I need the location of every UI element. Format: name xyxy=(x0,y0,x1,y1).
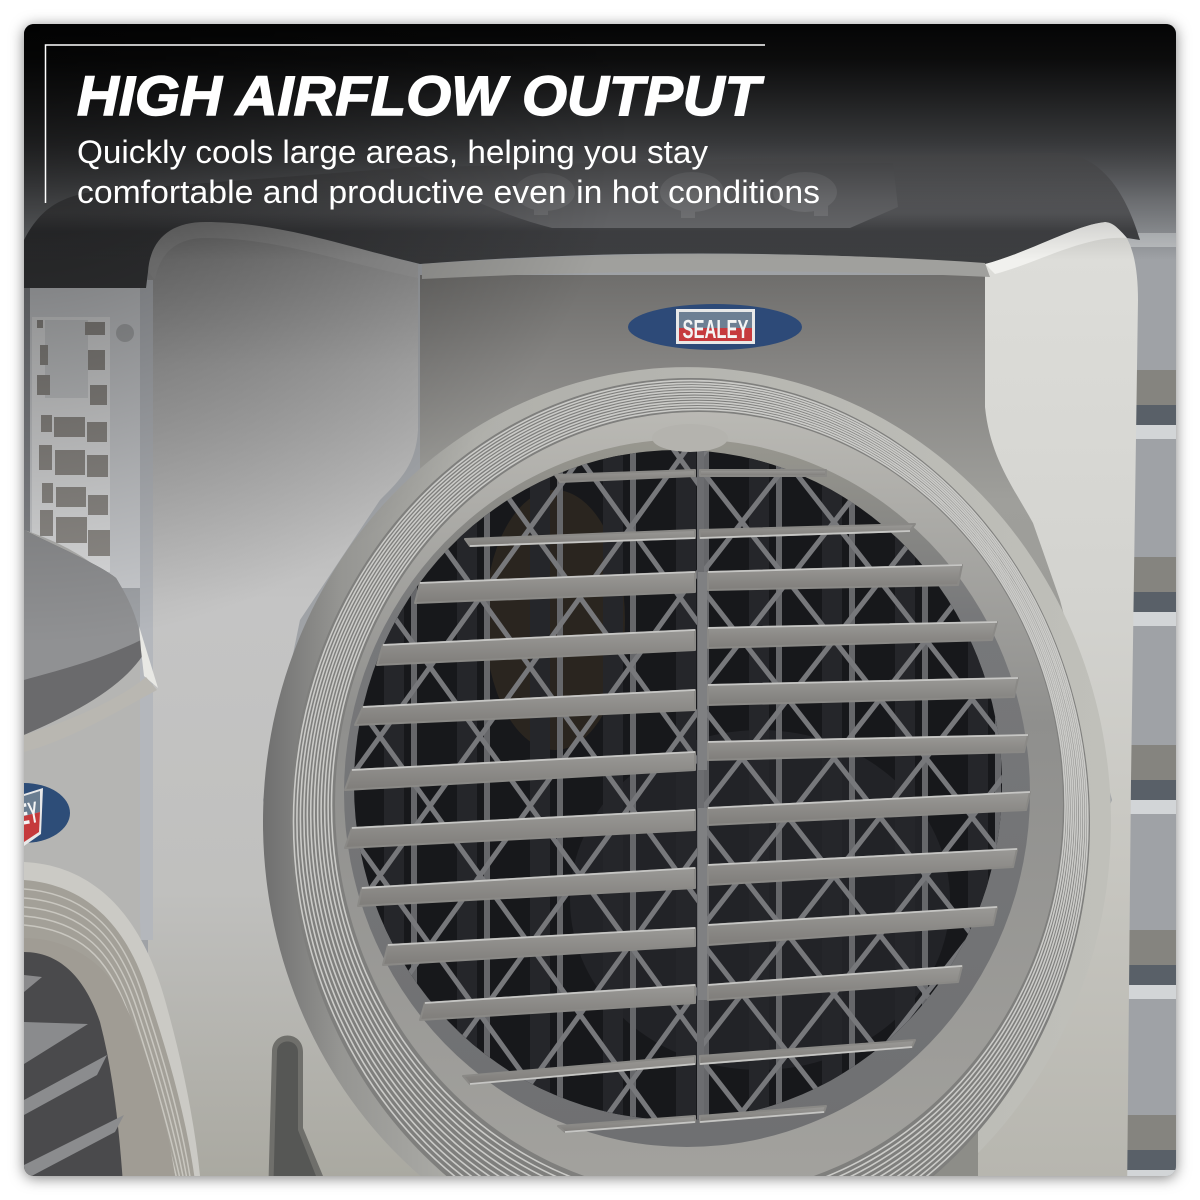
control panel recess xyxy=(402,163,898,228)
lower body wedge under ring xyxy=(880,1076,1002,1198)
ribbed ring lines xyxy=(294,381,1088,1198)
second ring ribs xyxy=(24,889,193,1198)
left louvres xyxy=(345,470,695,1132)
dome at top of grille xyxy=(652,424,728,452)
control knobs xyxy=(515,172,837,218)
louvre highlights xyxy=(352,531,1030,1132)
centre vertical bars xyxy=(698,572,707,1000)
left body panel xyxy=(140,222,450,1200)
right louvres xyxy=(700,470,1030,1122)
second cooler logo xyxy=(0,783,70,846)
title: HIGH AIRFLOW OUTPUT xyxy=(77,64,765,127)
second cooler ring xyxy=(24,862,202,1198)
text frame line xyxy=(46,45,765,203)
handle slot xyxy=(268,1036,323,1200)
side vent of cooler xyxy=(24,288,150,588)
left-side overlay shading xyxy=(0,0,700,700)
logo: Sealey badge: SEALEY xyxy=(682,314,748,344)
right body panel xyxy=(977,222,1138,1200)
second cooler in foreground left xyxy=(0,530,202,1200)
second cooler lid xyxy=(24,530,143,735)
lid lip highlight xyxy=(422,254,990,279)
top lid with controls xyxy=(24,153,1140,288)
dark gradient overlay behind text xyxy=(0,0,1200,260)
grille opening with lattice xyxy=(350,445,1010,1125)
logo: Sealey badge xyxy=(628,304,802,350)
round grille ring xyxy=(263,367,1111,1198)
description: comfortable and productive even in hot conditions xyxy=(77,174,820,210)
description: Quickly cools large areas, helping you stay xyxy=(77,134,708,170)
centre body panel xyxy=(420,275,1100,1200)
description xyxy=(77,134,820,210)
